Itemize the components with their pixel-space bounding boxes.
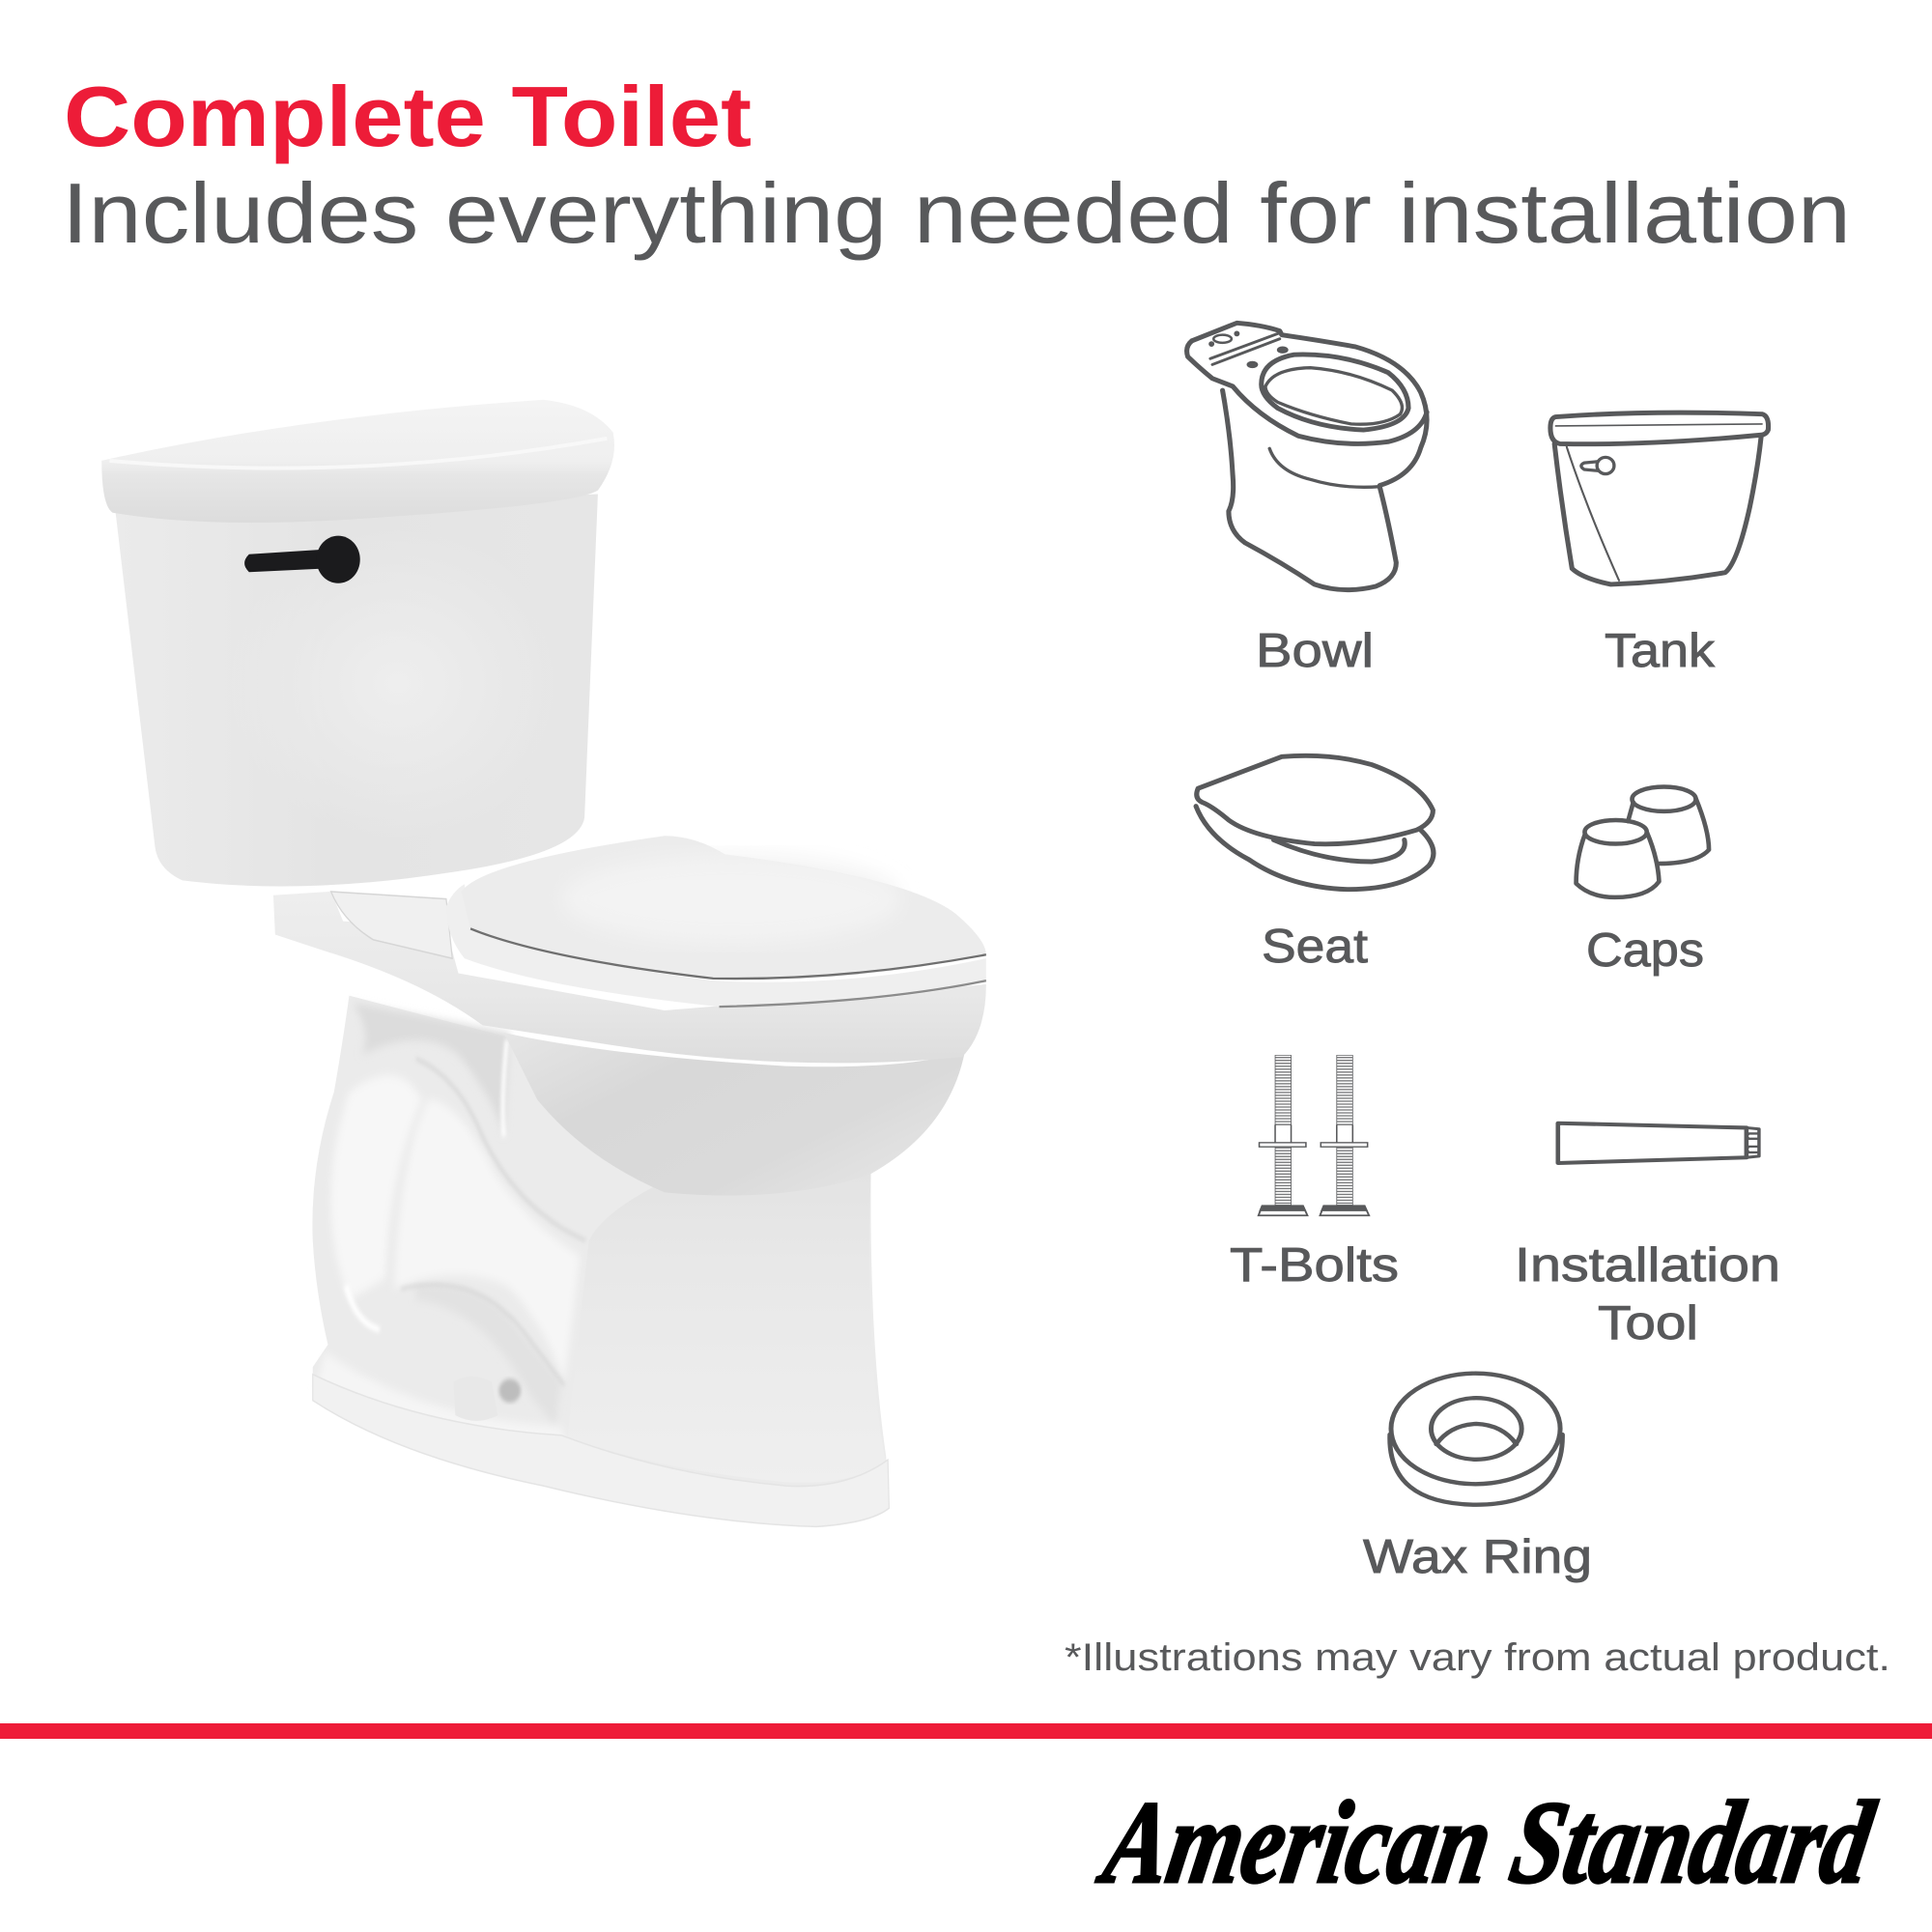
rim and deck <box>273 892 986 1063</box>
bolt cap on foot <box>453 1377 497 1421</box>
icon: bowl <box>1187 323 1427 590</box>
subtitle: Includes everything needed for installation <box>62 165 1851 261</box>
label: Caps: Caps <box>1586 924 1704 977</box>
icon: wax ring <box>1390 1374 1562 1505</box>
rear trapway body <box>312 996 889 1526</box>
wave highlights <box>346 1040 585 1385</box>
label: Wax Ring: Wax Ring <box>1363 1531 1592 1583</box>
title: Complete Toilet: Complete Toilet <box>64 69 752 164</box>
label: T-Bolts: T-Bolts <box>1230 1239 1399 1292</box>
label: Installation Tool <box>1515 1239 1780 1350</box>
icon: tank <box>1550 412 1769 584</box>
icon: T-bolts <box>1259 1055 1369 1215</box>
label: Installation Tool: Tool <box>1598 1297 1698 1350</box>
seat ring <box>446 884 986 1007</box>
tank lid <box>101 400 614 523</box>
left bolt <box>1259 1055 1307 1215</box>
product photo: two-piece toilet <box>101 400 986 1526</box>
red divider bar <box>0 1723 1932 1739</box>
bowl <box>504 1033 965 1196</box>
deck recess <box>331 892 452 958</box>
label: Seat: Seat <box>1262 921 1368 973</box>
label: Bowl: Bowl <box>1256 625 1374 677</box>
base foot <box>313 1375 889 1526</box>
icon: seat <box>1196 755 1434 890</box>
right bolt <box>1321 1055 1369 1215</box>
icon: caps <box>1577 787 1709 897</box>
label: Installation Tool: Installation <box>1515 1239 1780 1292</box>
flush handle <box>244 536 360 583</box>
tank body <box>116 495 598 887</box>
label: Tank: Tank <box>1605 625 1716 677</box>
pedestal <box>568 1174 886 1483</box>
recess shading <box>316 1003 580 1463</box>
seat lid <box>462 836 986 980</box>
footnote: *Illustrations may vary from actual product. <box>1065 1636 1890 1679</box>
icon: installation tool <box>1558 1123 1759 1163</box>
